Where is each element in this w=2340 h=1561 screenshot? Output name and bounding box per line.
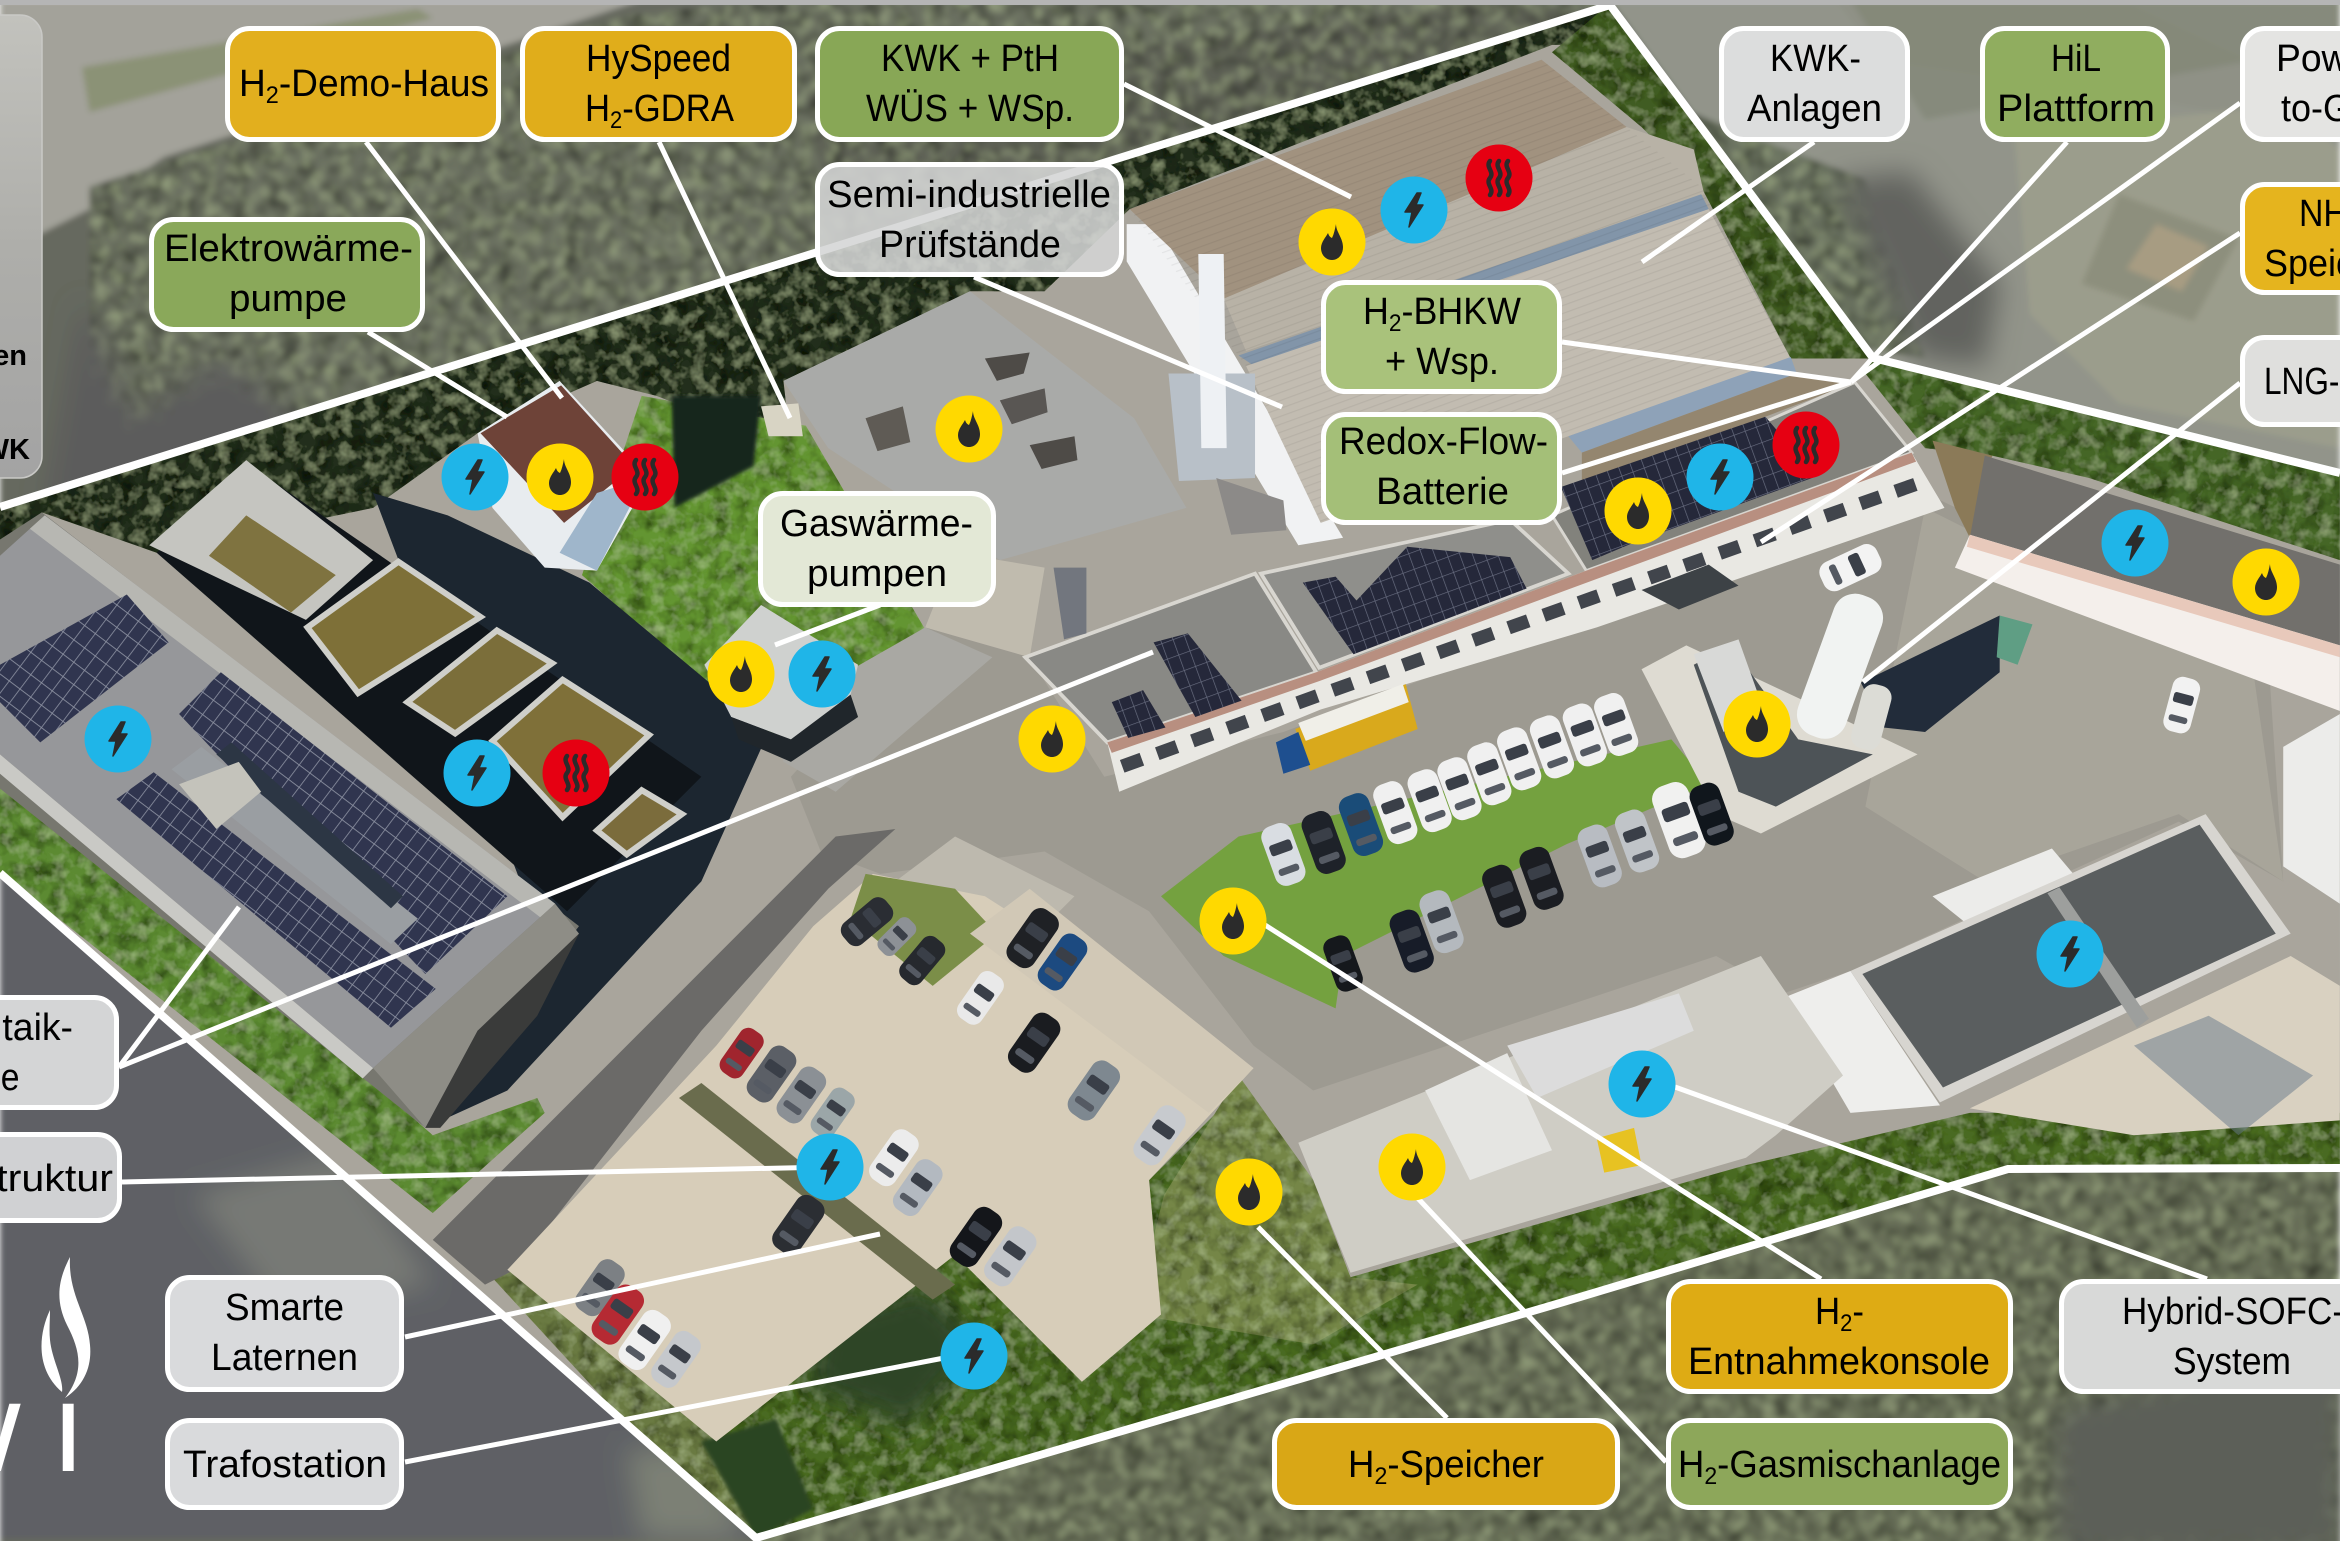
label: H2-BHKW + Wsp.: 2	[1389, 310, 1402, 337]
logo	[0, 1257, 90, 1491]
icon: gas (solar roof)	[1604, 478, 1672, 544]
label: H2-Speicher: H	[1348, 1444, 1375, 1486]
label: Photovoltaik-Anlage	[0, 998, 116, 1108]
icon: gas (gas heat pumps)	[708, 640, 774, 708]
icon: power (wings)	[444, 740, 510, 806]
label: KWK-Anlagen	[1722, 28, 1908, 140]
label: Trafostation	[168, 1420, 402, 1508]
bottom white margin	[0, 1541, 2340, 1561]
label: KWK + PtH	[818, 28, 1122, 140]
yellow delivery truck	[1276, 684, 1418, 774]
icon: power (charging)	[796, 1134, 864, 1200]
label: Power-to-Gas	[2242, 28, 2340, 140]
icon: gas (KWK hall)	[1298, 208, 1366, 276]
flat roof test hall	[783, 291, 1186, 560]
asphalt and yards	[791, 493, 2283, 1090]
label: H2-Entnahmekonsole: -	[1852, 1291, 1864, 1333]
left building with solar roof	[0, 512, 579, 1128]
icon: gas (extraction point)	[1200, 888, 1266, 954]
top edge band	[0, 0, 2340, 5]
site outline lower	[0, 873, 2340, 1538]
lower right hall	[1783, 814, 2340, 1135]
icon: power (upper right)	[2102, 510, 2168, 576]
logo flame	[41, 1257, 90, 1398]
icon: heat (wings)	[542, 740, 610, 806]
label: Hybrid-SOFC-System: System	[2173, 1341, 2291, 1383]
label: H2-BHKW + Wsp.: H	[1363, 291, 1390, 333]
label: Semi-industrielle Prüfstände	[818, 164, 1122, 274]
icon: heat (KWK hall)	[1466, 144, 1532, 212]
label: H2-Demo-Haus: H	[239, 63, 266, 105]
label: H2-Entnahmekonsole: 2	[1840, 1310, 1852, 1337]
label: HiL Plattform: Plattform	[1997, 88, 2155, 130]
label: HySpeed H2-GDRA: 2	[610, 107, 622, 134]
green roof wings	[149, 460, 682, 854]
icon: power (gas heat pumps)	[788, 640, 856, 708]
icon: heat (solar roof)	[1772, 412, 1840, 478]
label: Trafostation: Trafostation	[183, 1444, 387, 1486]
icon: gas (LNG)	[1724, 690, 1790, 758]
label: Smarte Laternen	[168, 1278, 402, 1390]
icon: power (demo house)	[442, 444, 508, 510]
icon: gas (test hall)	[936, 396, 1002, 462]
upper right building	[1933, 441, 2340, 904]
label: Elektrowärmepumpe: Elektrowärme-	[164, 228, 413, 270]
label: HiL Plattform: HiL	[2051, 38, 2101, 80]
icon: power (KWK hall)	[1380, 176, 1448, 244]
building shadows	[373, 493, 769, 1128]
parked cars	[571, 540, 2202, 1392]
label: H2-Speicher	[1274, 1420, 1618, 1508]
equipment pad	[1298, 956, 1843, 1273]
label: Elektrowärmepumpe: pumpe	[229, 278, 347, 320]
label: HySpeed H2-GDRA: -GDRA	[622, 88, 735, 130]
icon: gas (gas mixing)	[1378, 1134, 1446, 1200]
label: H2-BHKW + Wsp.: -BHKW	[1402, 291, 1521, 333]
icon: power (hybrid SOFC)	[1608, 1050, 1676, 1118]
icon: gas (service building)	[1018, 706, 1086, 772]
icon: power (lower right hall)	[2036, 920, 2104, 988]
label: KWK + PtH: WÜS + WSp.	[866, 88, 1074, 130]
label: H2-Gasmischanlage: 2	[1704, 1463, 1717, 1490]
label: H2-BHKW + Wsp.: + Wsp.	[1385, 341, 1499, 383]
icon: gas (H2 storage)	[1216, 1158, 1282, 1226]
label: Semi-industrielle Prüfstände: Prüfstände	[879, 224, 1061, 266]
logo wordmark: I	[55, 1385, 81, 1491]
label: HySpeed H2-GDRA	[522, 28, 794, 140]
demo house	[478, 381, 649, 571]
icon: heat (demo house)	[612, 444, 678, 510]
label: H2-Demo-Haus	[228, 28, 498, 140]
label: Gaswärmepumpen	[760, 494, 994, 604]
low service buildings	[1025, 382, 1944, 792]
large hall with corrugated roof	[1127, 60, 1855, 545]
label: Redox-Flow-Batterie: Redox-Flow-	[1339, 421, 1548, 463]
gas heat pump shed	[704, 605, 858, 739]
label: Smarte Laternen: Laternen	[211, 1337, 358, 1379]
site outline	[0, 5, 2340, 507]
label: H2-Gasmischanlage: H	[1678, 1444, 1705, 1486]
icon: power (left roof)	[84, 706, 152, 772]
label: Gaswärmepumpen: pumpen	[807, 553, 947, 595]
label: LNG-Tank	[2242, 338, 2340, 424]
label: Redox-Flow-Batterie	[1324, 414, 1560, 522]
label: H2-Entnahmekonsole: Entnahmekonsole	[1688, 1341, 1990, 1383]
parking lot	[507, 874, 1254, 1442]
label: HySpeed H2-GDRA: H	[585, 88, 612, 130]
label: NH3-Speicher	[2242, 184, 2340, 292]
label: Semi-industrielle Prüfstände: Semi-industrielle	[827, 174, 1111, 216]
label: Smarte Laternen: Smarte	[225, 1287, 344, 1329]
label: H2-Gasmischanlage	[1668, 1420, 2010, 1508]
label: H2-Speicher: -Speicher	[1387, 1444, 1544, 1486]
label: HiL Plattform	[1982, 28, 2168, 140]
icon: gas (demo house)	[526, 444, 594, 510]
icon: gas (upper right)	[2232, 548, 2300, 616]
label: H2-Entnahmekonsole	[1668, 1282, 2010, 1392]
label: KWK + PtH: KWK + PtH	[881, 38, 1059, 80]
label: Gaswärmepumpen: Gaswärme-	[780, 503, 973, 545]
label: Infrastruktur	[0, 1134, 120, 1220]
LNG tank yard	[1642, 587, 2033, 834]
icon: power (solar roof)	[1686, 444, 1754, 510]
lawn with parking rows	[1161, 739, 1709, 1008]
chimney	[1168, 373, 1255, 481]
label: H2-Gasmischanlage: -Gasmischanlage	[1717, 1444, 2001, 1486]
label: H2-Entnahmekonsole: H	[1815, 1291, 1842, 1333]
label: Elektrowärmepumpe	[152, 220, 422, 330]
label: Redox-Flow-Batterie: Batterie	[1376, 471, 1509, 513]
label: H2-Demo-Haus: -Demo-Haus	[279, 63, 489, 105]
label: KWK-Anlagen: KWK-	[1770, 38, 1861, 80]
label: H2-BHKW + Wsp.	[1324, 282, 1560, 392]
legend panel (cut off at left edge)	[0, 15, 42, 478]
label: Hybrid-SOFC-System	[2062, 1282, 2340, 1392]
label: H2-Speicher: 2	[1374, 1463, 1387, 1490]
icon: power (transformer)	[940, 1322, 1008, 1390]
label: HySpeed H2-GDRA: HySpeed	[586, 38, 731, 80]
label: KWK-Anlagen: Anlagen	[1747, 88, 1882, 130]
label: H2-Demo-Haus: 2	[266, 82, 279, 109]
